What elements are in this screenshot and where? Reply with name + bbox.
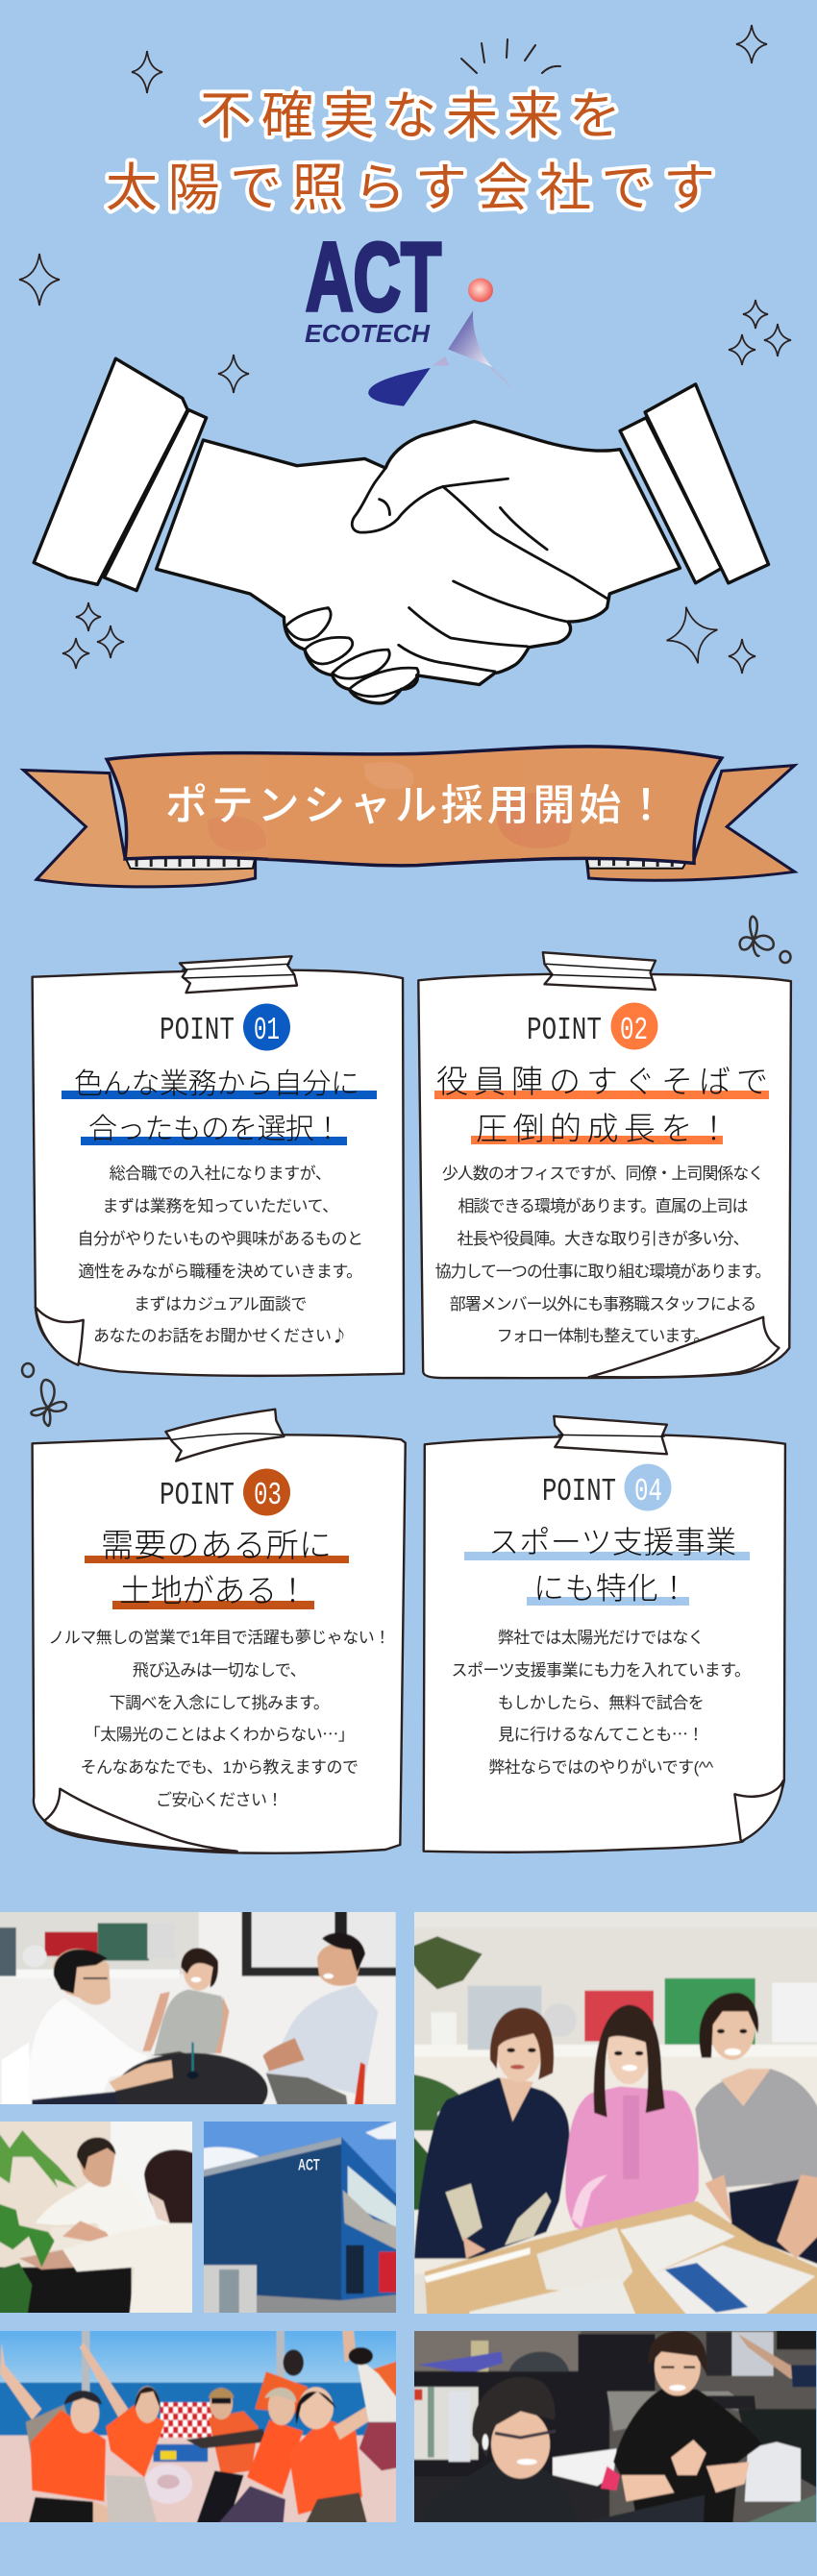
logo: ACT ECOTECH: ECOTECH [305,319,431,348]
photo: three women smiling at the office [414,1912,817,2314]
sign text on building: ACT [298,2157,320,2174]
text: point 02 body: 相談できる環境があります。直属の上司は [458,1197,749,1215]
illustration: handshake [33,357,771,705]
title [106,87,715,217]
text: point 04 body [452,1629,750,1777]
badge: point 03: POINT [160,1478,235,1513]
text: point 03 body: ノルマ無しの営業で1年目で活躍も夢じゃない！ [48,1629,390,1647]
text: point 02 body [435,1165,770,1345]
title: 太陽で照らす会社です [106,159,715,217]
doodles: flowers and circles [22,917,790,1426]
banner text: ポテンシャル採用開始！ [165,782,667,829]
photo: team in orange life vests on a boat [0,2331,396,2522]
heading: point 02: 圧倒的成長を！ [476,1111,730,1146]
badge: point 02: 02 [620,1013,648,1048]
text: point 02 body: 社長や役員陣。大きな取り引きが多い分、 [457,1230,749,1248]
text: point 04 body: スポーツ支援事業にも力を入れています。 [452,1661,750,1680]
badge: point 01 [160,1003,290,1051]
heading: point 01 [62,1068,377,1145]
heading: point 01: 合ったものを選択！ [88,1114,342,1145]
text: point 02 body: フォロー体制も整えています。 [497,1327,708,1345]
text: point 02 body: 協力して一つの仕事に取り組む環境があります。 [435,1263,770,1281]
text: point 01 body: まずは業務を知っていただいて、 [102,1197,338,1215]
badge: point 01: 01 [254,1013,280,1048]
heading: point 02 [434,1064,769,1146]
text: point 02 body: 部署メンバー以外にも事務職スタッフによる [450,1295,755,1313]
badge: point 02 [527,1003,657,1049]
title: 不確実な未来を [200,87,621,145]
panel: point 04 [424,1416,785,1852]
photo: man explaining documents to a colleague [0,2122,192,2313]
text: point 03 body: そんなあなたでも、1から教えますので [81,1758,358,1777]
heading: point 04: にも特化！ [533,1571,689,1606]
heading: point 02: 役員陣のすぐそばで [436,1064,768,1099]
panel: point 01 [33,956,404,1376]
text: point 04 body: 見に行けるなんてことも…！ [498,1721,704,1745]
text: point 04 body: 弊社では太陽光だけではなく [498,1629,704,1647]
text: point 01 body: まずはカジュアル面談で [134,1295,307,1313]
photo: ACT building exterior [204,2122,396,2313]
text: point 01 body: 総合職での入社になりますが、 [110,1165,331,1183]
decorative sparkles: top group [19,25,791,674]
badge: point 04: POINT [542,1474,616,1509]
badge: point 04: 04 [634,1474,662,1509]
panel: point 03 [33,1410,406,1853]
photo: two colleagues smiling at their desks [414,2331,816,2522]
icon: sun rays above title [461,39,560,73]
text: point 03 body: 「太陽光のことはよくわからない…」 [85,1721,354,1745]
text: point 01 body: 自分がやりたいものや興味があるものと [77,1230,363,1248]
heading: point 03: 需要のある所に [101,1528,332,1564]
badge: point 03 [160,1468,290,1516]
text: point 02 body: 少人数のオフィスですが、同僚・上司関係なく [442,1165,763,1183]
panel: point 02 [418,952,791,1378]
badge: point 04 [542,1464,671,1510]
badge: point 03: 03 [254,1478,282,1513]
heading: point 01: 色んな業務から自分に [74,1068,359,1100]
text: point 03 body: 下調べを入念にして挑みます。 [110,1694,329,1712]
badge: point 01: POINT [160,1013,235,1048]
heading: point 04 [464,1525,750,1606]
photo: three colleagues chatting at a table [0,1912,396,2104]
logo: ACT ECOTECH: ACT [306,224,441,331]
badge: point 02: POINT [527,1013,602,1048]
text: point 04 body: もしかしたら、無料で試合を [498,1694,704,1712]
logo: ACT ECOTECH [305,224,512,406]
text: point 03 body: ご安心ください！ [156,1791,283,1809]
text: point 04 body: 弊社ならではのやりがいです(^^ [488,1758,713,1777]
text: point 03 body: 飛び込みは一切なしで、 [133,1661,306,1680]
heading: point 03 [85,1528,349,1609]
text: point 01 body: あなたのお話をお聞かせください♪ [93,1322,347,1346]
text: point 01 body [77,1165,363,1346]
heading: point 03: 土地がある！ [119,1573,309,1608]
heading: point 04: スポーツ支援事業 [488,1525,736,1559]
banner: ribbon [19,745,799,888]
text: point 03 body [48,1629,390,1809]
text: point 01 body: 適性をみながら職種を決めていきます。 [78,1263,362,1281]
